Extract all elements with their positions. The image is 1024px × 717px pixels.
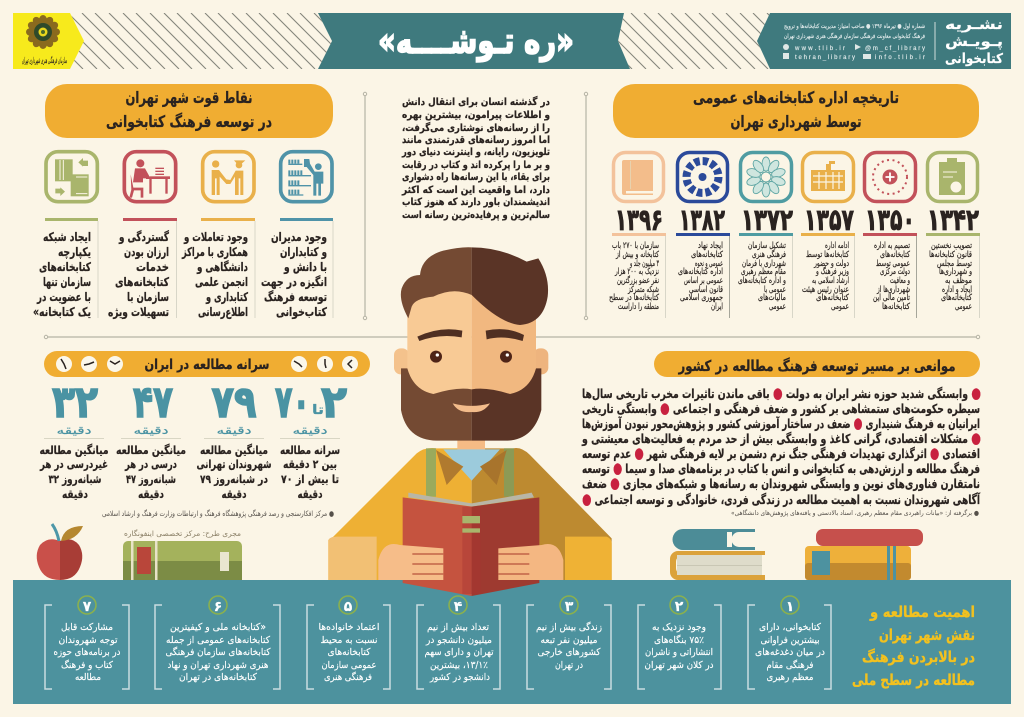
item 4: دانشجو در کشور <box>429 672 490 683</box>
item 3: کشورهای خارجی <box>538 647 601 658</box>
text: column 2: کتابداری و <box>205 290 248 305</box>
publication info: www.tlib.ir <box>794 46 845 52</box>
callout heading <box>852 603 975 689</box>
intro text block: و بر ما را پرکرده اند و کتاب در رقابت <box>402 160 550 171</box>
icon: teal rosette <box>740 152 792 202</box>
stat: 79: ۷۹ <box>212 377 256 428</box>
timeline: 1382: عمومی بر اساس <box>684 276 723 286</box>
item 4: تهران و دارای سهم <box>424 647 494 658</box>
publication info: فرهنگ کتابخوانی معاونت فرهنگی سازمان فرهنگی هنری شهرداری تهران <box>784 32 925 40</box>
heading: strengths <box>45 84 333 138</box>
timeline: 1382: اداره کتابخانه‌های <box>678 267 723 277</box>
stat: 2 to 70: ۲ <box>321 377 347 428</box>
timeline: 1357: وزیر فرهنگ و <box>815 266 849 277</box>
item 1: ۱ <box>786 599 794 615</box>
callout heading: مطالعه در سطح ملی <box>852 671 975 689</box>
item 3: میلیون نفر تبعه <box>540 635 598 646</box>
timeline: 1342: کتابخانه‌های <box>941 293 973 303</box>
text: column 1: وجود مدیران <box>271 230 327 245</box>
timeline: 1396 <box>609 233 666 318</box>
timeline: 1357: عنوان رئیس هیئت <box>802 285 849 295</box>
stat: 79: شهروندان تهرانی <box>196 457 272 472</box>
item 5: اعتماد خانواده‌ها <box>318 622 380 633</box>
icon: apple <box>37 524 83 580</box>
timeline: 1382 <box>676 233 730 318</box>
callout heading: نقش شهر تهران <box>879 626 975 644</box>
item 6: ۶ <box>214 599 222 615</box>
timeline: 1342: توسط مجلس <box>937 259 972 269</box>
timeline: 1396: شبکه متمرکز <box>627 285 659 295</box>
item 2: ۷۵٪ بنگاه‌های <box>654 634 704 646</box>
callout heading: در بالابردن فرهنگ <box>862 648 975 666</box>
heading: obstacles <box>654 351 980 377</box>
text: column 3: کتابخانه‌های <box>115 275 169 289</box>
timeline: 1372: عمومی با <box>764 285 786 295</box>
timeline: 1342: قانون کتابخانه‌ها <box>929 250 972 260</box>
timeline: 1342: ایجاد و اداره <box>942 285 972 295</box>
timeline: 1396: کتابخانه و بیش از <box>615 250 660 260</box>
stat: 47: دقیقه <box>138 487 164 501</box>
timeline: 1350: عمومی توسط <box>876 259 910 269</box>
stat: 47: میانگین مطالعه <box>116 443 186 457</box>
header band: سازمان فرهنگی هنری شهرداری تهران <box>22 55 67 65</box>
timeline: 1357: ادامه اداره <box>825 241 849 251</box>
title: «ره تـوشــــه» <box>378 21 574 62</box>
publication info: tehran_library <box>795 55 855 61</box>
hands <box>378 544 563 580</box>
body <box>328 439 612 580</box>
text: column 4: با عضویت در <box>36 290 91 305</box>
stat: 47 <box>116 377 186 501</box>
item 2: ۲ <box>675 599 684 615</box>
years: ۱۳۴۲ <box>927 203 979 238</box>
heading with clocks: سرانه مطالعه در ایران <box>144 357 270 373</box>
stat: 2 to 70: تا بیش از ۷۰ <box>281 472 339 486</box>
stat: 79: میانگین مطالعه <box>200 443 268 457</box>
eyes <box>430 351 512 363</box>
heading: strengths: در توسعه فرهنگ کتابخوانی <box>106 112 272 131</box>
item 5: نسبت به محیط <box>320 635 378 646</box>
icon: green book <box>123 541 242 580</box>
text: column 1: با دانش و <box>283 260 327 275</box>
text: column 3: سازمان با <box>127 290 169 304</box>
intro text block: دارد، اما واقعیت این است که اکثر <box>401 185 550 196</box>
text: column 3: خدمات <box>136 260 169 274</box>
stat: 2 to 70: دقیقه <box>298 487 323 501</box>
item 2 <box>638 596 721 689</box>
icon: blue rosette <box>678 152 728 202</box>
item 4: میلیون دانشجو در <box>425 635 492 646</box>
stat: 32: دقیقه <box>56 424 92 437</box>
item 6: هنری شهرداری تهران و نهاد <box>168 660 268 671</box>
stat: 79 <box>196 377 272 501</box>
stat: 2 to 70: بین ۲ دقیقه <box>283 457 337 471</box>
years: ۱۳۵۰ <box>865 203 915 238</box>
timeline: 1382: قانون اساسی <box>689 285 723 295</box>
obstacles text: ایرانیان به فرهنگ شنیداری ● ضعف در ساختار آموزشی کشور و پژوهش‌محور نبودن آموزش‌ها <box>582 414 980 432</box>
item 1: کتابخوانی، دارای <box>759 622 821 633</box>
timeline: 1372: شهرداری با فرمان <box>742 259 786 269</box>
item 1: در میان دغدغه‌های <box>755 647 825 658</box>
item 7: مطالعه <box>75 672 101 683</box>
timeline: 1350: شهرداری‌ها از <box>876 285 910 295</box>
callout heading: اهمیت مطالعه و <box>869 603 975 621</box>
divider lines <box>44 92 980 339</box>
timeline: 1357: عمومی <box>831 302 849 312</box>
heading with clocks <box>44 351 370 377</box>
stat: 32: میانگین مطالعه <box>40 443 108 457</box>
item 6: کتابخانه‌های سازمان فرهنگی <box>166 646 271 658</box>
obstacles text <box>581 384 981 508</box>
timeline: 1350 <box>863 233 917 318</box>
item 4: ۴ <box>454 599 463 615</box>
stat: 32: غیردرسی در هر <box>39 457 108 471</box>
stat: 2 to 70: دقیقه <box>292 424 328 437</box>
text: column 1: انگیزه در جهت <box>261 275 327 289</box>
item 7: مشارکت قابل <box>61 622 113 633</box>
publication name: نشـریه <box>945 17 1003 33</box>
timeline: 1350: کتابخانه‌ها <box>882 302 911 312</box>
timeline: 1396: سازمان با ۲۷۰ باب <box>612 241 659 251</box>
heading: history <box>613 84 979 138</box>
stat: 47: ۴۷ <box>133 377 173 428</box>
timeline: 1382: ایجاد نهاد <box>698 241 723 251</box>
timeline: 1342: عمومی <box>955 302 972 312</box>
timeline: 1357: کتابخانه‌ها توسط <box>806 250 850 260</box>
years: ۱۳۷۲ <box>741 203 793 238</box>
icon: exchange books <box>46 152 97 202</box>
icon: building <box>802 152 854 202</box>
panel: obstacles <box>581 351 981 517</box>
years: ۱۳۸۲ <box>679 203 725 238</box>
text: column 1: توسعه فرهنگ <box>264 290 327 305</box>
text: column 3 <box>108 218 177 320</box>
timeline: 1350: دولت مرکزی <box>880 267 910 277</box>
publication info: شماره اول ● تیرماه ۱۳۹۶ ● صاحب امتیاز: مدیریت کتابخانه‌ها و ترویج <box>784 23 925 30</box>
item 7: کتاب و فرهنگ <box>61 659 113 671</box>
text: column 4: ایجاد شبکه <box>43 230 91 244</box>
timeline: 1350: و معافیت <box>890 276 910 286</box>
icon: clipboard <box>928 152 978 202</box>
face <box>407 290 536 403</box>
item 1: فرهنگی مقام <box>766 659 814 671</box>
years: ۱۳۵۷ <box>804 203 854 238</box>
source note: ● مرکز افکارسنجی و رصد فرهنگی پژوهشگاه فرهنگ و ارتباطات وزارت فرهنگ و ارشاد اسلامی <box>102 509 334 518</box>
text: column 3: گستردگی و <box>118 230 169 245</box>
timeline: 1396: منطقه را داراست <box>618 302 659 312</box>
item 6 <box>155 596 280 689</box>
timeline: 1350: تأمین مالی این <box>873 291 910 303</box>
timeline: 1382: عمومی و نحوه <box>695 259 723 269</box>
item 5: فرهنگی هنری <box>324 671 372 683</box>
publication info: @m_cf_library <box>865 46 925 52</box>
item 3: در تهران <box>555 660 583 671</box>
stat: 79: دقیقه <box>216 424 252 437</box>
item 4: ۱۳/۱٪، بیشترین <box>430 660 488 671</box>
item 6: کتابخانه‌های عمومی از جمله <box>166 635 270 646</box>
stat: 79: دقیقه <box>222 487 247 501</box>
text: column 3: تسهیلات ویژه <box>108 305 169 320</box>
timeline: 1342: و شهرداری‌ها <box>939 267 972 277</box>
stat: 47: دقیقه <box>134 424 169 437</box>
timeline: 1382: کتابخانه‌های <box>691 250 724 260</box>
item 2: انتشاراتی و ناشران <box>645 647 713 658</box>
stat: 2 to 70 <box>275 377 347 501</box>
obstacles text: ● وابستگی شدید حوزه نشر ایران به دولت ● باقی ماندن تاثیرات مخرب تاریخی سال‌ها <box>582 384 981 402</box>
timeline: 1350: تصمیم به اداره <box>874 241 910 251</box>
icon: handshake <box>203 152 254 202</box>
timeline: 1372 <box>738 233 793 318</box>
text: column 4: کتابخانه‌های <box>39 260 91 274</box>
timeline: 1357: دولت و حضور <box>813 259 849 269</box>
hair <box>401 247 548 325</box>
stat: 2 to 70: تا <box>312 403 324 418</box>
icon: teal book stack <box>670 529 765 580</box>
timeline: 1382: ایران <box>711 302 723 312</box>
item 7: توجه شهروندان <box>58 635 118 646</box>
timeline: 1342 <box>926 233 980 318</box>
stat: 79: در شبانه‌روز ۷۹ <box>200 472 268 487</box>
item 6: «کتابخانه ملی و کیفیترین <box>170 622 266 633</box>
beard <box>401 368 541 441</box>
years: ۱۳۹۶ <box>615 203 663 238</box>
item 1: معظم رهبری <box>766 672 814 683</box>
intro text block: تلویزیون، رایانه، و اینترنت دنیای دور <box>401 147 550 158</box>
panel: reading per capita <box>39 351 370 518</box>
stat: 32: ۳۲ <box>52 377 98 428</box>
timeline: 1342: موظف به <box>945 276 972 286</box>
text: column 3: ارزان بودن <box>124 245 169 260</box>
intro text block: سالم‌ترین و پرفایده‌ترین رسانه است <box>402 210 550 221</box>
item 7: در برنامه‌های حوزه <box>54 647 120 658</box>
publication name: پـویـش <box>945 34 1003 50</box>
publication name: کتابخوانی <box>945 51 1003 67</box>
text: column 2: دانشگاهی و <box>196 260 248 275</box>
timeline: 1372: مالیات‌های <box>758 293 786 303</box>
credit line: مجری طرح: مرکز تخصصی اینفونگاره <box>124 529 241 538</box>
intro text block: در گذشته انسان برای انتقال دانش <box>402 95 550 108</box>
text: column 1: و کتابداران <box>280 245 327 260</box>
timeline: 1372: مقام معظم رهبری <box>741 267 786 277</box>
heading: history: تاریخچه اداره کتابخانه‌های عمومی <box>693 88 899 108</box>
timeline: 1396: ۳ میلیون جلد و <box>629 259 659 269</box>
intro text block: برای بقاء، با این رسانه‌ها راه دشواری <box>402 172 550 183</box>
intro text block: اندیشمندان باور دارند که هنوز کتاب <box>402 197 550 208</box>
item 2: در کلان شهر تهران <box>644 660 714 671</box>
intro text block: و اطلاعات پیرامون، بیشترین بهره <box>402 110 550 121</box>
publication info <box>783 22 936 61</box>
item 3: زندگی بیش از نیم <box>536 621 602 633</box>
timeline: 1357: ارشاد اسلامی به <box>812 276 849 286</box>
publication info: info.tlib.ir <box>875 55 925 61</box>
icon: red and orange book stack <box>805 529 923 580</box>
timeline: 1372: و اداره کتابخانه‌های <box>738 276 786 286</box>
text: column 2: همکاری با مراکز <box>181 245 248 259</box>
timeline: 1382: جمهوری اسلامی <box>680 293 723 303</box>
timeline: 1396: کتابخانه‌ها در سطح <box>609 293 660 303</box>
text: column 1: کتاب‌خوانی <box>276 305 327 320</box>
item 7: ۷ <box>83 599 92 615</box>
timeline: 1372: عمومی <box>769 302 786 312</box>
item 5 <box>307 596 390 689</box>
item 5: ۵ <box>344 599 353 615</box>
panel: history of libraries <box>609 84 980 318</box>
timeline: 1350: کتابخانه‌های <box>880 250 911 260</box>
stat: 2 to 70: ۷۰ <box>275 377 310 428</box>
text: column 1 <box>261 218 334 320</box>
header band <box>13 13 1011 69</box>
item 1: بیشترین فراوانی <box>760 635 820 646</box>
ears <box>394 348 548 374</box>
timeline: 1357 <box>801 233 855 318</box>
item 3: ۳ <box>565 599 574 615</box>
text: column 2 <box>181 218 256 319</box>
years <box>615 203 979 238</box>
item 1 <box>748 596 831 689</box>
character: bearded man reading <box>328 247 612 596</box>
stat: 32 <box>39 377 108 501</box>
eyebrows <box>417 329 524 341</box>
icon: librarian shelves <box>281 152 332 202</box>
source note: obstacles: ● برگرفته از: «بیانات راهبردی مقام معظم رهبری، اسناد بالادستی و یافته‌های پژوهش‌های دانشگاهی» <box>731 509 979 517</box>
stat: 32: شبانه‌روز ۳۲ <box>48 472 102 487</box>
stat: 32: دقیقه <box>62 487 88 501</box>
heading: obstacles: موانعی بر مسیر توسعه فرهنگ مطالعه در کشور <box>678 357 956 375</box>
timeline: 1372: تشکیل سازمان <box>748 241 786 251</box>
panel: strengths of Tehran <box>33 84 334 320</box>
text: column 4: سازمان تنها <box>43 275 91 289</box>
timeline: 1396: نزدیک به ۲۰۰ هزار <box>614 267 659 277</box>
item 2: وجود نزدیک به <box>652 622 706 633</box>
icon: book <box>614 152 664 202</box>
icon: person at desk <box>124 152 176 202</box>
text: column 2: وجود تعاملات و <box>183 230 248 245</box>
open book <box>403 493 539 596</box>
text: column 2: اطلاع‌رسانی <box>198 305 248 319</box>
item 7 <box>45 596 129 689</box>
stat: 47: شبانه‌روز ۴۷ <box>126 472 176 487</box>
timeline: 1342: تصویب نخستین <box>931 241 972 251</box>
item 3 <box>527 596 611 689</box>
timeline: 1372: فرهنگی هنری <box>752 249 786 260</box>
item 5: کتابخانه‌های <box>328 647 371 658</box>
heading: strengths: نقاط قوت شهر تهران <box>126 88 252 107</box>
intro text block: اما امروز رسانه‌های قدرتمندی مانند <box>402 135 550 146</box>
text: column 4 <box>33 218 98 319</box>
text: column 2: انجمن علمی <box>195 275 248 289</box>
item 4 <box>417 596 500 689</box>
stat: 47: درسی در هر <box>124 457 177 471</box>
intro text block <box>401 95 550 221</box>
stat: 2 to 70: سرانه مطالعه <box>280 443 340 457</box>
publication name <box>945 17 1003 67</box>
intro text block: را از رسانه‌های نوشتاری می‌گرفت، <box>402 121 550 134</box>
icon: dotted circle with plus <box>864 152 916 202</box>
timeline: 1357: کتابخانه‌های <box>816 293 850 303</box>
logo <box>13 13 84 69</box>
item 6: کتابخانه‌های در تهران <box>179 672 257 683</box>
mouth <box>453 403 490 412</box>
item 4: تعداد بیش از نیم <box>427 622 489 633</box>
text: column 4: یکپارچه <box>58 245 91 259</box>
item 5: عمومی سازمان <box>322 660 376 671</box>
timeline: 1396: نفر عضو بزرگترین <box>617 275 659 286</box>
panel: importance of reading <box>13 580 1011 704</box>
text: column 4: یک کتابخانه» <box>33 305 91 319</box>
heading: history: توسط شهرداری تهران <box>730 112 862 131</box>
